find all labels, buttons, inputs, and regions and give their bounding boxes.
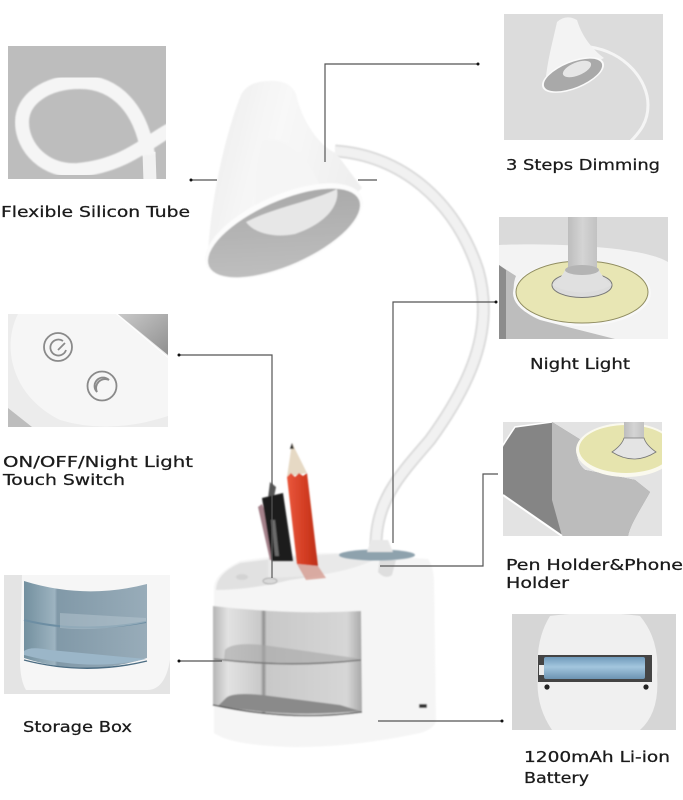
heading: Flexible Silicon Tube: Flexible Silicon Tube xyxy=(1,203,190,221)
panel: pen holder and phone holder photo xyxy=(503,422,676,536)
arrow: night light leader xyxy=(393,300,498,543)
arrow: storage box leader xyxy=(178,660,222,662)
heading: 1200mAh Li-ion Battery: 1200mAh Li-ion xyxy=(524,748,670,766)
panel: touch switch photo xyxy=(8,314,168,427)
pencil in holder xyxy=(287,443,326,580)
arrow: flexible tube leader xyxy=(190,178,377,182)
heading: 1200mAh Li-ion Battery: Battery xyxy=(524,769,589,787)
panel: storage box photo xyxy=(4,575,170,694)
heading: 1200mAh Li-ion Battery xyxy=(524,748,670,787)
heading: Storage Box: Storage Box xyxy=(23,718,132,736)
arrow: touch switch leader xyxy=(178,354,272,578)
arrow: battery leader xyxy=(378,720,504,722)
lamp: head xyxy=(192,81,376,298)
heading: Pen Holder & Phone Holder: Pen Holder&Phone xyxy=(506,556,683,574)
heading: ON/OFF/Night Light Touch Switch xyxy=(2,453,193,489)
lamp: gooseneck arm xyxy=(335,151,483,545)
pen in holder xyxy=(258,482,293,561)
heading: Pen Holder & Phone Holder: Holder xyxy=(506,574,570,592)
icon: power touch button xyxy=(44,333,72,361)
lamp: base with storage drawer xyxy=(213,553,436,747)
arrow: 3 steps dimming leader xyxy=(325,62,480,162)
heading: 3 Steps Dimming: 3 Steps Dimming xyxy=(506,156,660,174)
panel: night light photo xyxy=(499,217,668,339)
arrow: pen holder leader xyxy=(380,474,498,566)
heading: Night Light: Night Light xyxy=(530,355,630,373)
panel: 3 steps dimming photo xyxy=(504,14,663,142)
heading: ON/OFF/Night Light Touch Switch: ON/OFF/Night Light xyxy=(3,453,193,471)
panel: flexible silicon tube photo xyxy=(8,46,170,182)
heading: Pen Holder & Phone Holder xyxy=(506,556,683,592)
icon: night light touch button xyxy=(88,372,116,400)
heading: ON/OFF/Night Light Touch Switch: Touch Switch xyxy=(2,471,125,489)
panel: battery photo xyxy=(512,613,676,730)
lamp: neck collar and night light disc xyxy=(339,540,415,560)
